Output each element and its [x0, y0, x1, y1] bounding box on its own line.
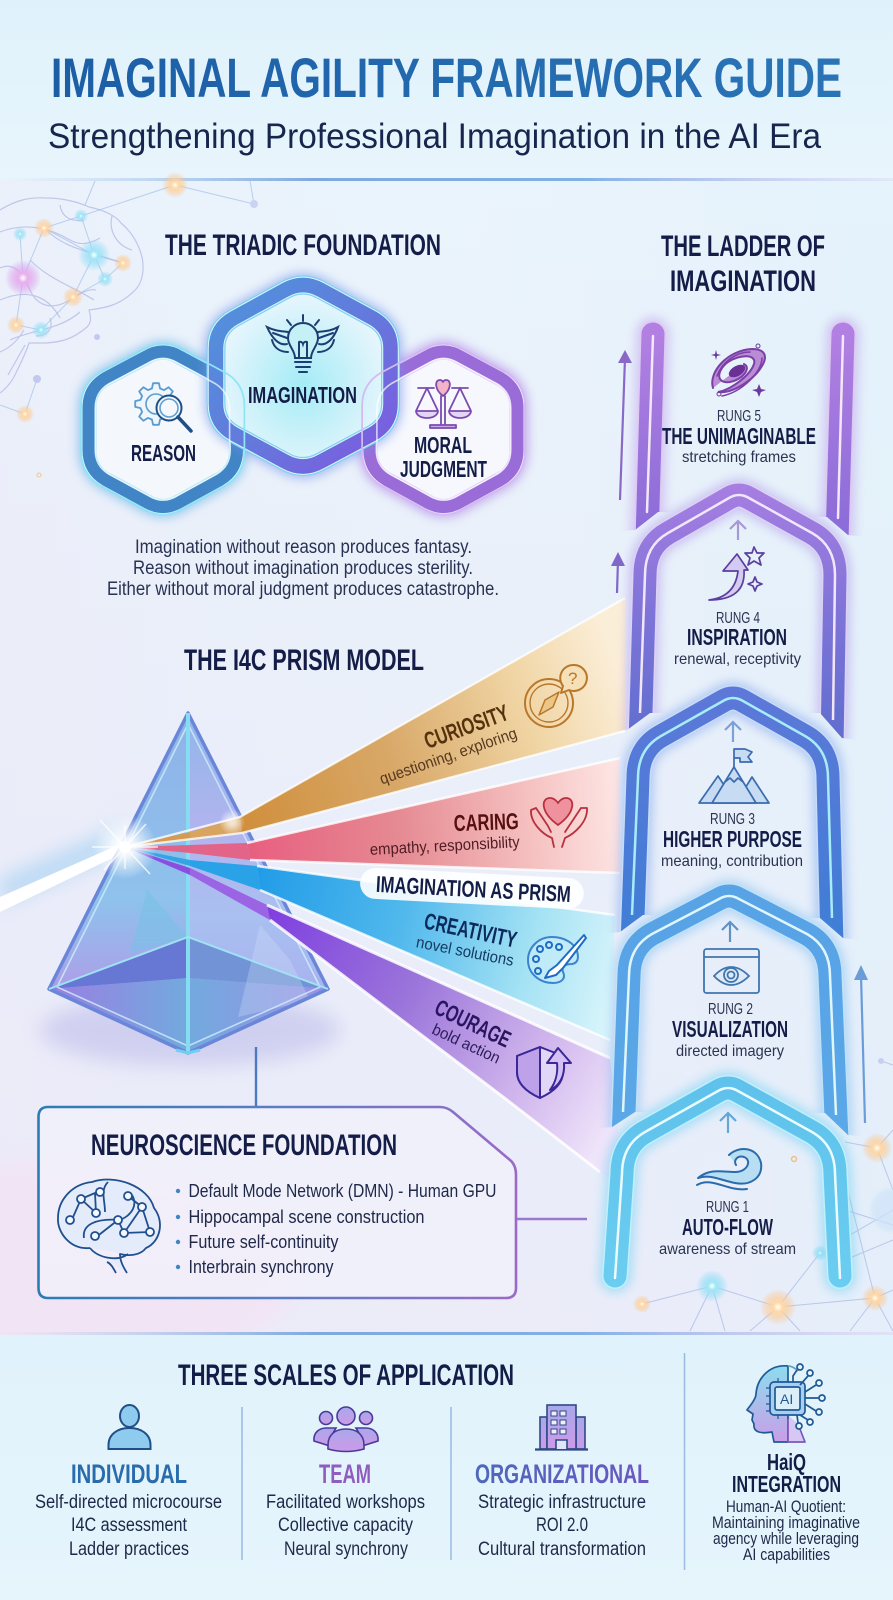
connector: neuroscience box to ladder: [516, 1218, 587, 1220]
list: individual: Ladder practices: [69, 1539, 189, 1560]
text: rung 4: RUNG 4: [716, 610, 760, 627]
description: haiq: AI capabilities: [743, 1546, 830, 1564]
label: imagination as prism: IMAGINATION AS PRISM: [375, 871, 571, 907]
icon: winged light bulb: [267, 315, 338, 372]
column: haiq integration: [712, 1364, 860, 1564]
icon: rising arrow and stars: [709, 547, 764, 600]
triadic description text: [107, 537, 499, 600]
text: rung 5: THE UNIMAGINABLE: [662, 423, 816, 449]
label: reason: REASON: [131, 440, 196, 466]
label: courage description: bold action: [429, 1021, 503, 1068]
heading: the ladder of imagination: [661, 230, 825, 298]
connector: prism to neuroscience box: [255, 1047, 257, 1107]
label: imagination: IMAGINATION: [248, 382, 357, 408]
icon: office building: [535, 1405, 588, 1450]
text: rung 2: directed imagery: [676, 1043, 784, 1060]
list: team: [266, 1492, 425, 1560]
icon: shield and arrow: [517, 1047, 571, 1098]
text: rung 2: RUNG 2: [708, 1001, 753, 1018]
list: organizational: Cultural transformation: [478, 1539, 646, 1560]
decorative network bottom right: [633, 1058, 893, 1331]
arrow: rung 2: [722, 922, 738, 942]
icon: person: [108, 1405, 150, 1449]
heading: the ladder of imagination: IMAGINATION: [670, 265, 816, 298]
light starburst: [92, 815, 158, 879]
text: rung 3: meaning, contribution: [661, 853, 803, 870]
prism light rays: [92, 598, 625, 1190]
rung 2: [623, 896, 837, 1140]
label: courage: COURAGE: [431, 994, 515, 1053]
text: rung 4: renewal, receptivity: [674, 651, 801, 668]
list: organizational: ROI 2.0: [536, 1515, 588, 1536]
icon: compass with question: [525, 665, 587, 727]
side arrows: [611, 350, 868, 1123]
icon: compass with question: ?: [568, 669, 577, 688]
heading: team: TEAM: [319, 1459, 371, 1489]
icon: galaxy: [712, 349, 765, 396]
rung 3: [632, 698, 832, 945]
heading: three scales of application: THREE SCALES OF APPLICATION: [178, 1359, 514, 1392]
glass prism body: [49, 713, 328, 1053]
triadic description text: Imagination without reason produces fantasy.: [135, 537, 472, 558]
label: creativity description: novel solutions: [415, 934, 515, 970]
label: imagination as prism: [359, 867, 585, 910]
icon: scales with heart: [416, 380, 471, 428]
list: team: Neural synchrony: [284, 1539, 408, 1560]
rung 5: [647, 334, 843, 540]
heading: haiq integration: [732, 1449, 841, 1497]
column: individual: [35, 1405, 222, 1560]
bullet list: Interbrain synchrony: [188, 1257, 334, 1277]
decorative brain network top left: [0, 172, 258, 477]
text: rung 4: INSPIRATION: [687, 624, 787, 650]
icon: brain network: [58, 1180, 160, 1273]
list: individual: Self-directed microcourse: [35, 1492, 222, 1513]
arrow: rung 4: [730, 521, 746, 540]
column dividers: [242, 1353, 684, 1570]
text: rung 1: awareness of stream: [659, 1241, 796, 1258]
icon: group of people: [314, 1407, 378, 1452]
interlocking outlines: [81, 344, 525, 515]
icon: palette and brush: [528, 935, 586, 983]
description: haiq: Human-AI Quotient:: [726, 1498, 846, 1516]
heading: haiq integration: HaiQ: [767, 1449, 806, 1475]
bullet list: Default Mode Network (DMN) - Human GPU: [188, 1181, 496, 1201]
icon: AI head: AI: [780, 1391, 793, 1407]
prism shadow: [40, 994, 340, 1066]
text: rung 4: [674, 610, 801, 668]
bullet list: [176, 1181, 497, 1277]
text: rung 1: AUTO-FLOW: [682, 1214, 773, 1240]
heading: the i4c prism model: THE I4C PRISM MODEL: [184, 644, 424, 677]
description: haiq: Maintaining imaginative: [712, 1514, 860, 1532]
label: creativity: CREATIVITY: [422, 908, 519, 953]
icon: hands holding heart: [531, 798, 587, 847]
icon: mountain with flag: [699, 749, 769, 803]
arrow: rung 3: [725, 722, 741, 742]
icon: wave: [697, 1149, 761, 1189]
text: rung 3: RUNG 3: [710, 811, 755, 828]
hexagon: reason: [88, 352, 237, 507]
arrow: rung 1: [720, 1113, 736, 1133]
column: team: [266, 1407, 425, 1560]
icon: eye in window: [704, 949, 759, 993]
label: curiosity description: questioning, exploring: [378, 725, 519, 788]
description: haiq: agency while leveraging: [713, 1530, 859, 1548]
bullet list: Hippocampal scene construction: [188, 1207, 424, 1227]
list: individual: I4C assessment: [71, 1515, 188, 1536]
hexagon: moral judgment: [370, 352, 518, 507]
text: rung 2: VISUALIZATION: [672, 1016, 788, 1042]
text: rung 3: [661, 811, 803, 870]
text: rung 2: [672, 1001, 788, 1060]
input light beam: [0, 825, 125, 912]
label: caring description: empathy, responsibility: [369, 834, 520, 859]
heading: the triadic foundation: THE TRIADIC FOUNDATION: [165, 229, 441, 262]
text: rung 1: RUNG 1: [706, 1199, 749, 1216]
ray: courage: [125, 847, 625, 1190]
panel: neuroscience foundation: [38, 1107, 516, 1298]
label: moral judgment: MORAL: [414, 432, 472, 458]
label: curiosity: CURIOSITY: [420, 699, 512, 754]
prism diagram: [0, 713, 340, 1066]
triadic hexagon diagram: [81, 285, 525, 515]
text: rung 5: stretching frames: [682, 449, 796, 466]
text: rung 1: [659, 1199, 796, 1258]
ray: caring: [125, 758, 620, 873]
rung 4: [640, 495, 835, 745]
ladder diagram: [611, 334, 868, 1278]
heading: organizational: ORGANIZATIONAL: [475, 1459, 649, 1489]
list: organizational: Strategic infrastructure: [478, 1492, 646, 1513]
list: team: Facilitated workshops: [266, 1492, 425, 1513]
icon: gear and magnifier: [135, 383, 191, 431]
ray: creativity: [125, 847, 615, 1040]
subtitle: Strengthening Professional Imagination in the AI Era: [48, 117, 822, 156]
text: rung 5: [662, 408, 816, 466]
description: haiq: [712, 1498, 860, 1564]
bullet list: Future self-continuity: [188, 1232, 338, 1252]
text: rung 5: RUNG 5: [717, 408, 761, 425]
column: organizational: [475, 1405, 649, 1560]
rung 1: [615, 1088, 840, 1278]
list: team: Collective capacity: [278, 1515, 413, 1536]
text: rung 3: HIGHER PURPOSE: [663, 826, 802, 852]
list: individual: [35, 1492, 222, 1560]
label: caring: CARING: [453, 808, 519, 836]
triadic description text: Either without moral judgment produces catastrophe.: [107, 579, 499, 600]
label: moral judgment: [400, 432, 487, 482]
heading: neuroscience foundation: NEUROSCIENCE FOUNDATION: [91, 1129, 397, 1162]
list: organizational: [478, 1492, 646, 1560]
ray: curiosity: [125, 598, 625, 847]
heading: individual: INDIVIDUAL: [71, 1459, 187, 1489]
icon: AI head: [747, 1364, 825, 1442]
hexagon: imagination: [216, 285, 390, 466]
heading: haiq integration: INTEGRATION: [732, 1471, 841, 1497]
label: moral judgment: JUDGMENT: [400, 456, 487, 482]
triadic description text: Reason without imagination produces sterility.: [133, 558, 473, 579]
